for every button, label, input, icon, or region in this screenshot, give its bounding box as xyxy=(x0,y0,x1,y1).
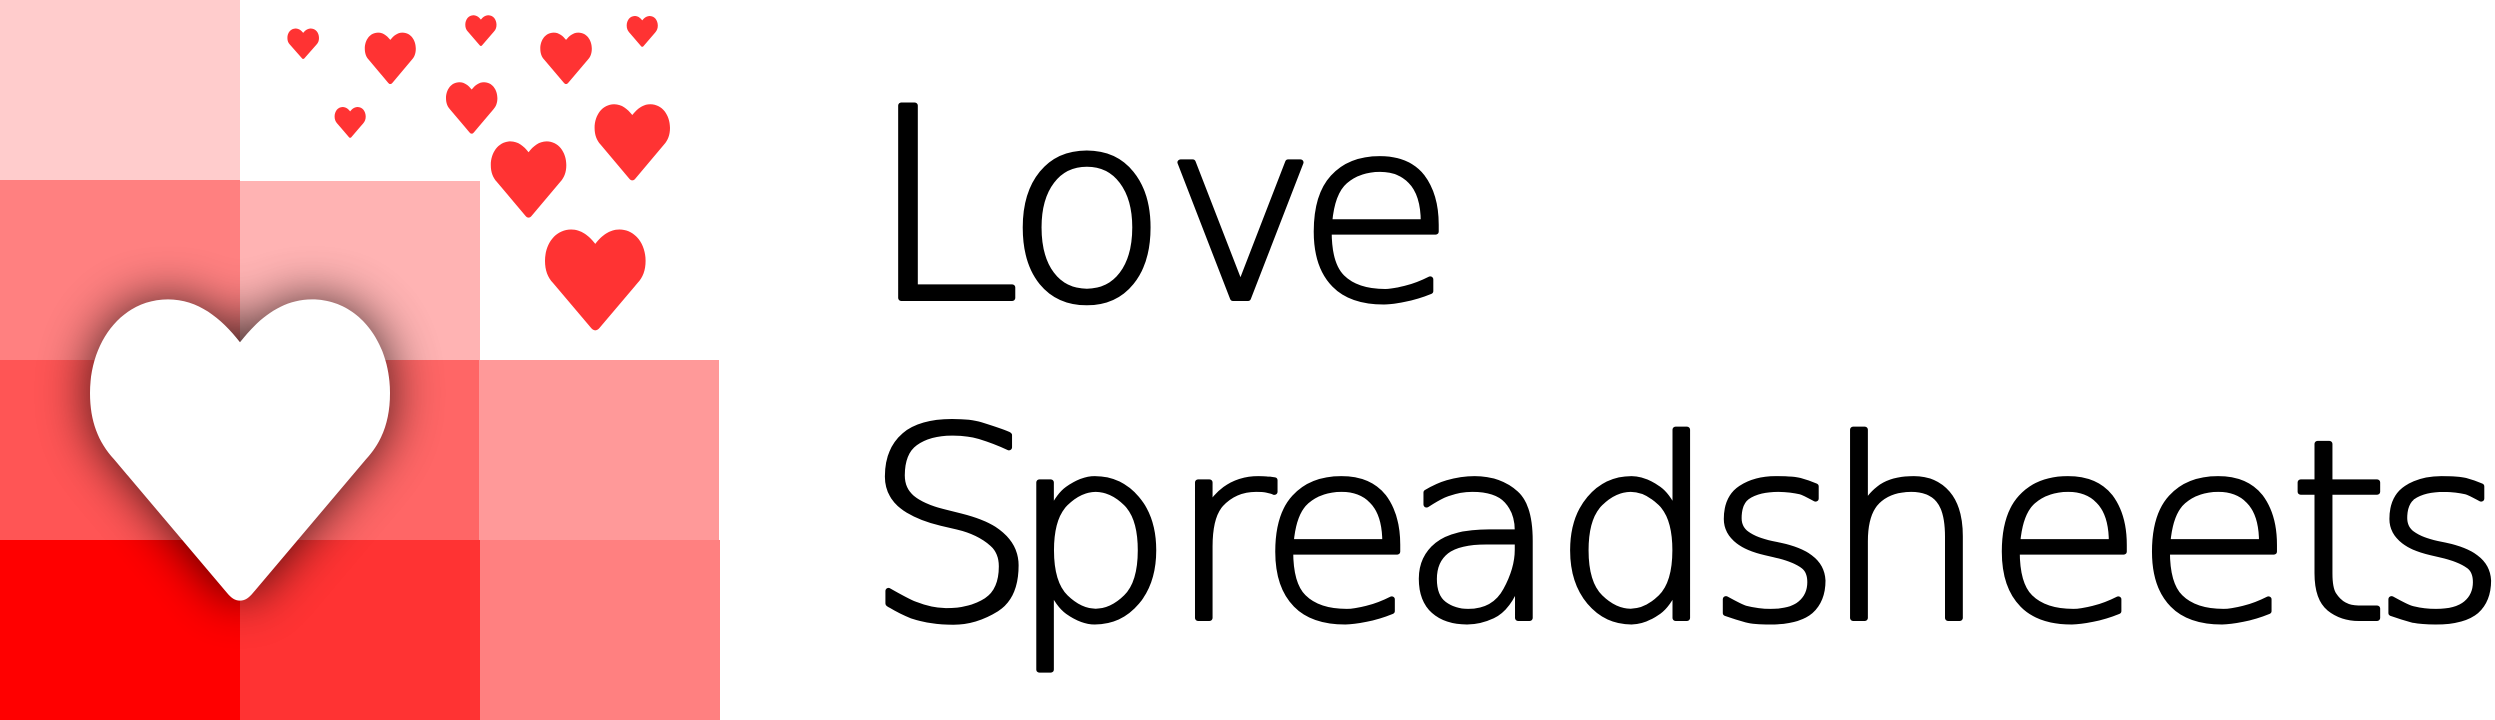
title: Spreadsheets: Spreadsheets xyxy=(864,373,2495,681)
title: Love: Love xyxy=(868,53,1455,361)
icon: floating red hearts xyxy=(287,15,670,330)
logo: stepped spreadsheet grid xyxy=(0,0,720,720)
icon: large white heart with shadow xyxy=(90,299,390,601)
